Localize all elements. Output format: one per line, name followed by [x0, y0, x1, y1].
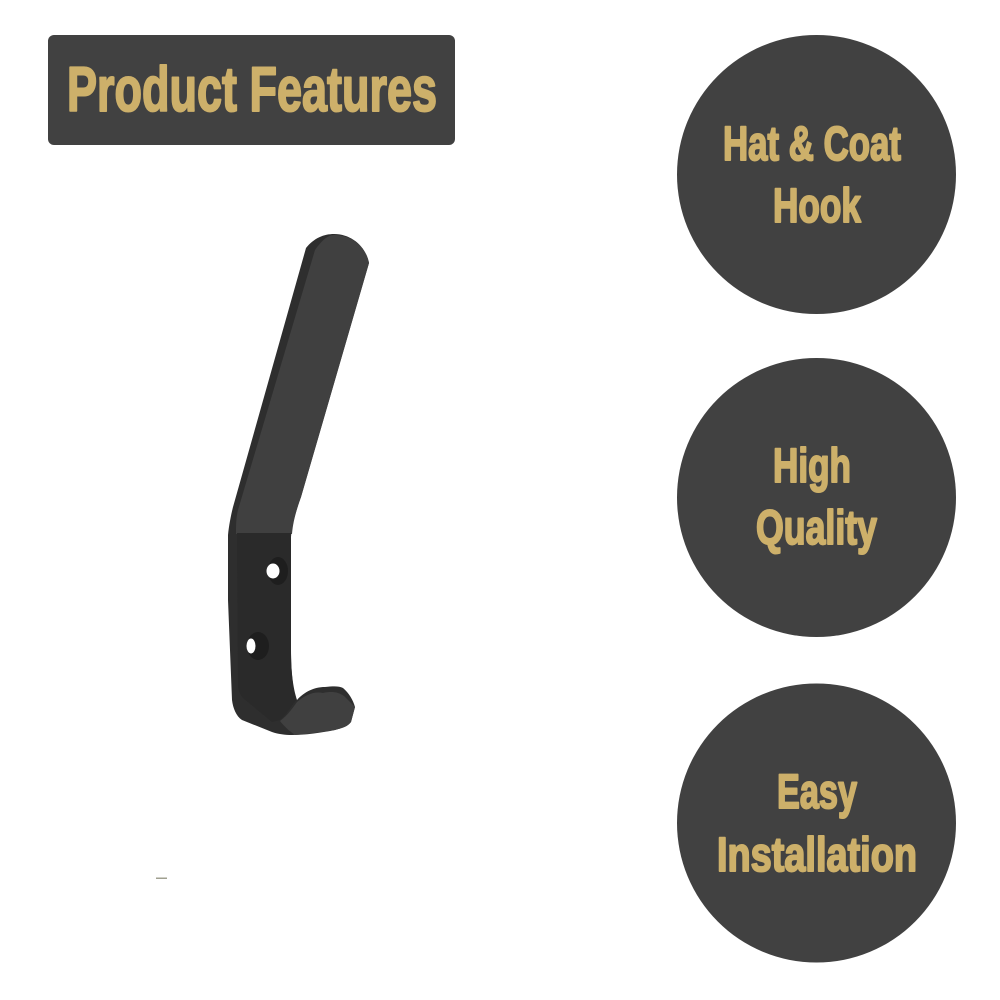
upper screw hole: [266, 557, 288, 585]
hook silhouette and side edge: [228, 234, 369, 735]
upper arm face: [236, 235, 369, 534]
feature circle: easy installation: [677, 684, 956, 962]
small speck artefact: [156, 878, 167, 879]
lower plate face: [237, 533, 296, 722]
feature circle: hat and coat hook: Hat & Coat: [723, 118, 901, 171]
icon: black coat hook product: [228, 234, 369, 735]
feature circle: easy installation: Installation: [717, 829, 917, 882]
feature circle: easy installation: Easy: [777, 766, 857, 819]
hook tip face: [280, 692, 355, 735]
lower screw hole: [246, 632, 269, 660]
feature circle: hat and coat hook: Hook: [773, 180, 861, 233]
feature circle: high quality: Quality: [756, 502, 877, 555]
title banner: Product Features: [67, 55, 437, 125]
feature circle: hat and coat hook: [677, 35, 956, 314]
feature circle: high quality: High: [773, 440, 851, 493]
feature circle: high quality: [677, 358, 956, 637]
title banner: [48, 35, 455, 145]
